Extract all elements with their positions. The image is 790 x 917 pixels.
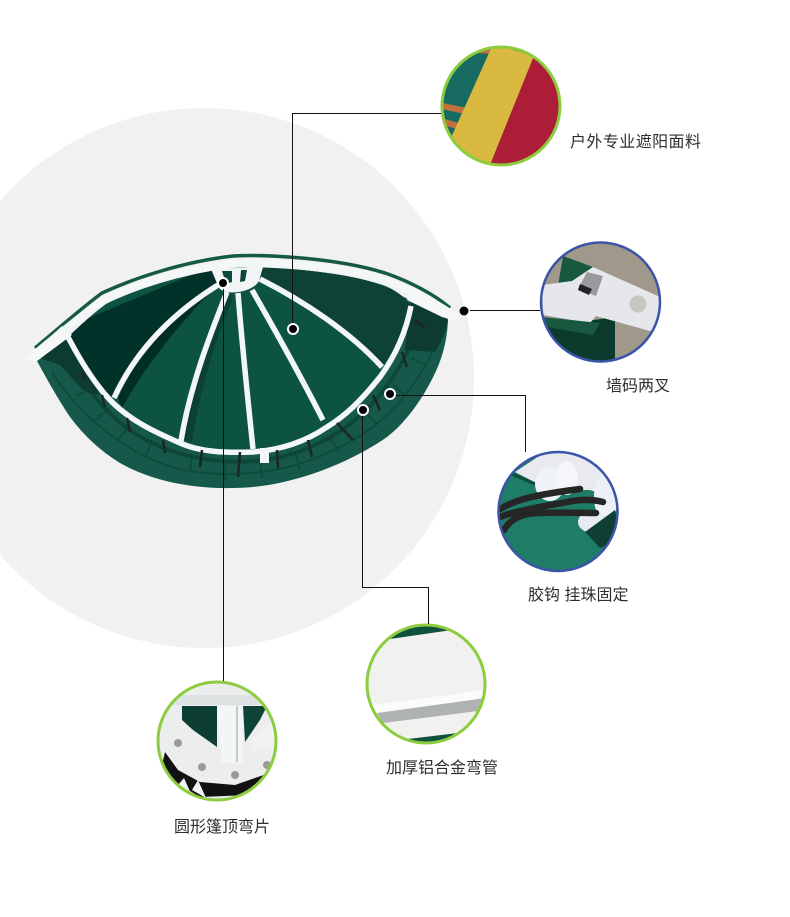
- label: wall mount: 墙码两叉: [606, 377, 670, 395]
- detail 4: dome bracket: [157, 681, 279, 803]
- label: fabric: 户外专业遮阳面料: [570, 133, 701, 151]
- dark shaded panels: [60, 262, 420, 442]
- hub bracket: [211, 267, 263, 292]
- lower frame arc: [68, 306, 411, 452]
- detail 3: rubber hook and bungee: [497, 451, 620, 573]
- skirt folds: [52, 352, 432, 480]
- infographic: [0, 46, 700, 834]
- awning illustration: [27, 256, 459, 488]
- background circle: [0, 108, 474, 648]
- label: rubber hook: 胶钩 挂珠固定: [528, 586, 628, 604]
- leader line: dome bracket: [218, 278, 228, 681]
- frame end tabs: [27, 287, 459, 364]
- canopy interior: [68, 268, 411, 452]
- label: aluminium tube: 加厚铝合金弯管: [386, 759, 498, 777]
- dark band below frame: [75, 335, 415, 462]
- radial ribs: [114, 279, 382, 449]
- detail 2: wall mount: [540, 241, 662, 365]
- label: dome bracket: 圆形篷顶弯片: [174, 817, 270, 836]
- detail 5: aluminium tube: [366, 622, 488, 748]
- center tab: [260, 448, 269, 463]
- elastic ties: [82, 320, 425, 477]
- canopy skirt: [37, 295, 448, 488]
- leader line: wall mount: [460, 306, 540, 316]
- leader line: aluminium tube: [358, 405, 428, 624]
- top frame arc: [28, 263, 457, 360]
- dark corners of skirt: [40, 300, 448, 395]
- green binding along top: [35, 256, 450, 348]
- leader line: fabric: [288, 114, 441, 334]
- leader line: rubber hook: [385, 389, 526, 452]
- detail 1: fabric: [440, 46, 562, 166]
